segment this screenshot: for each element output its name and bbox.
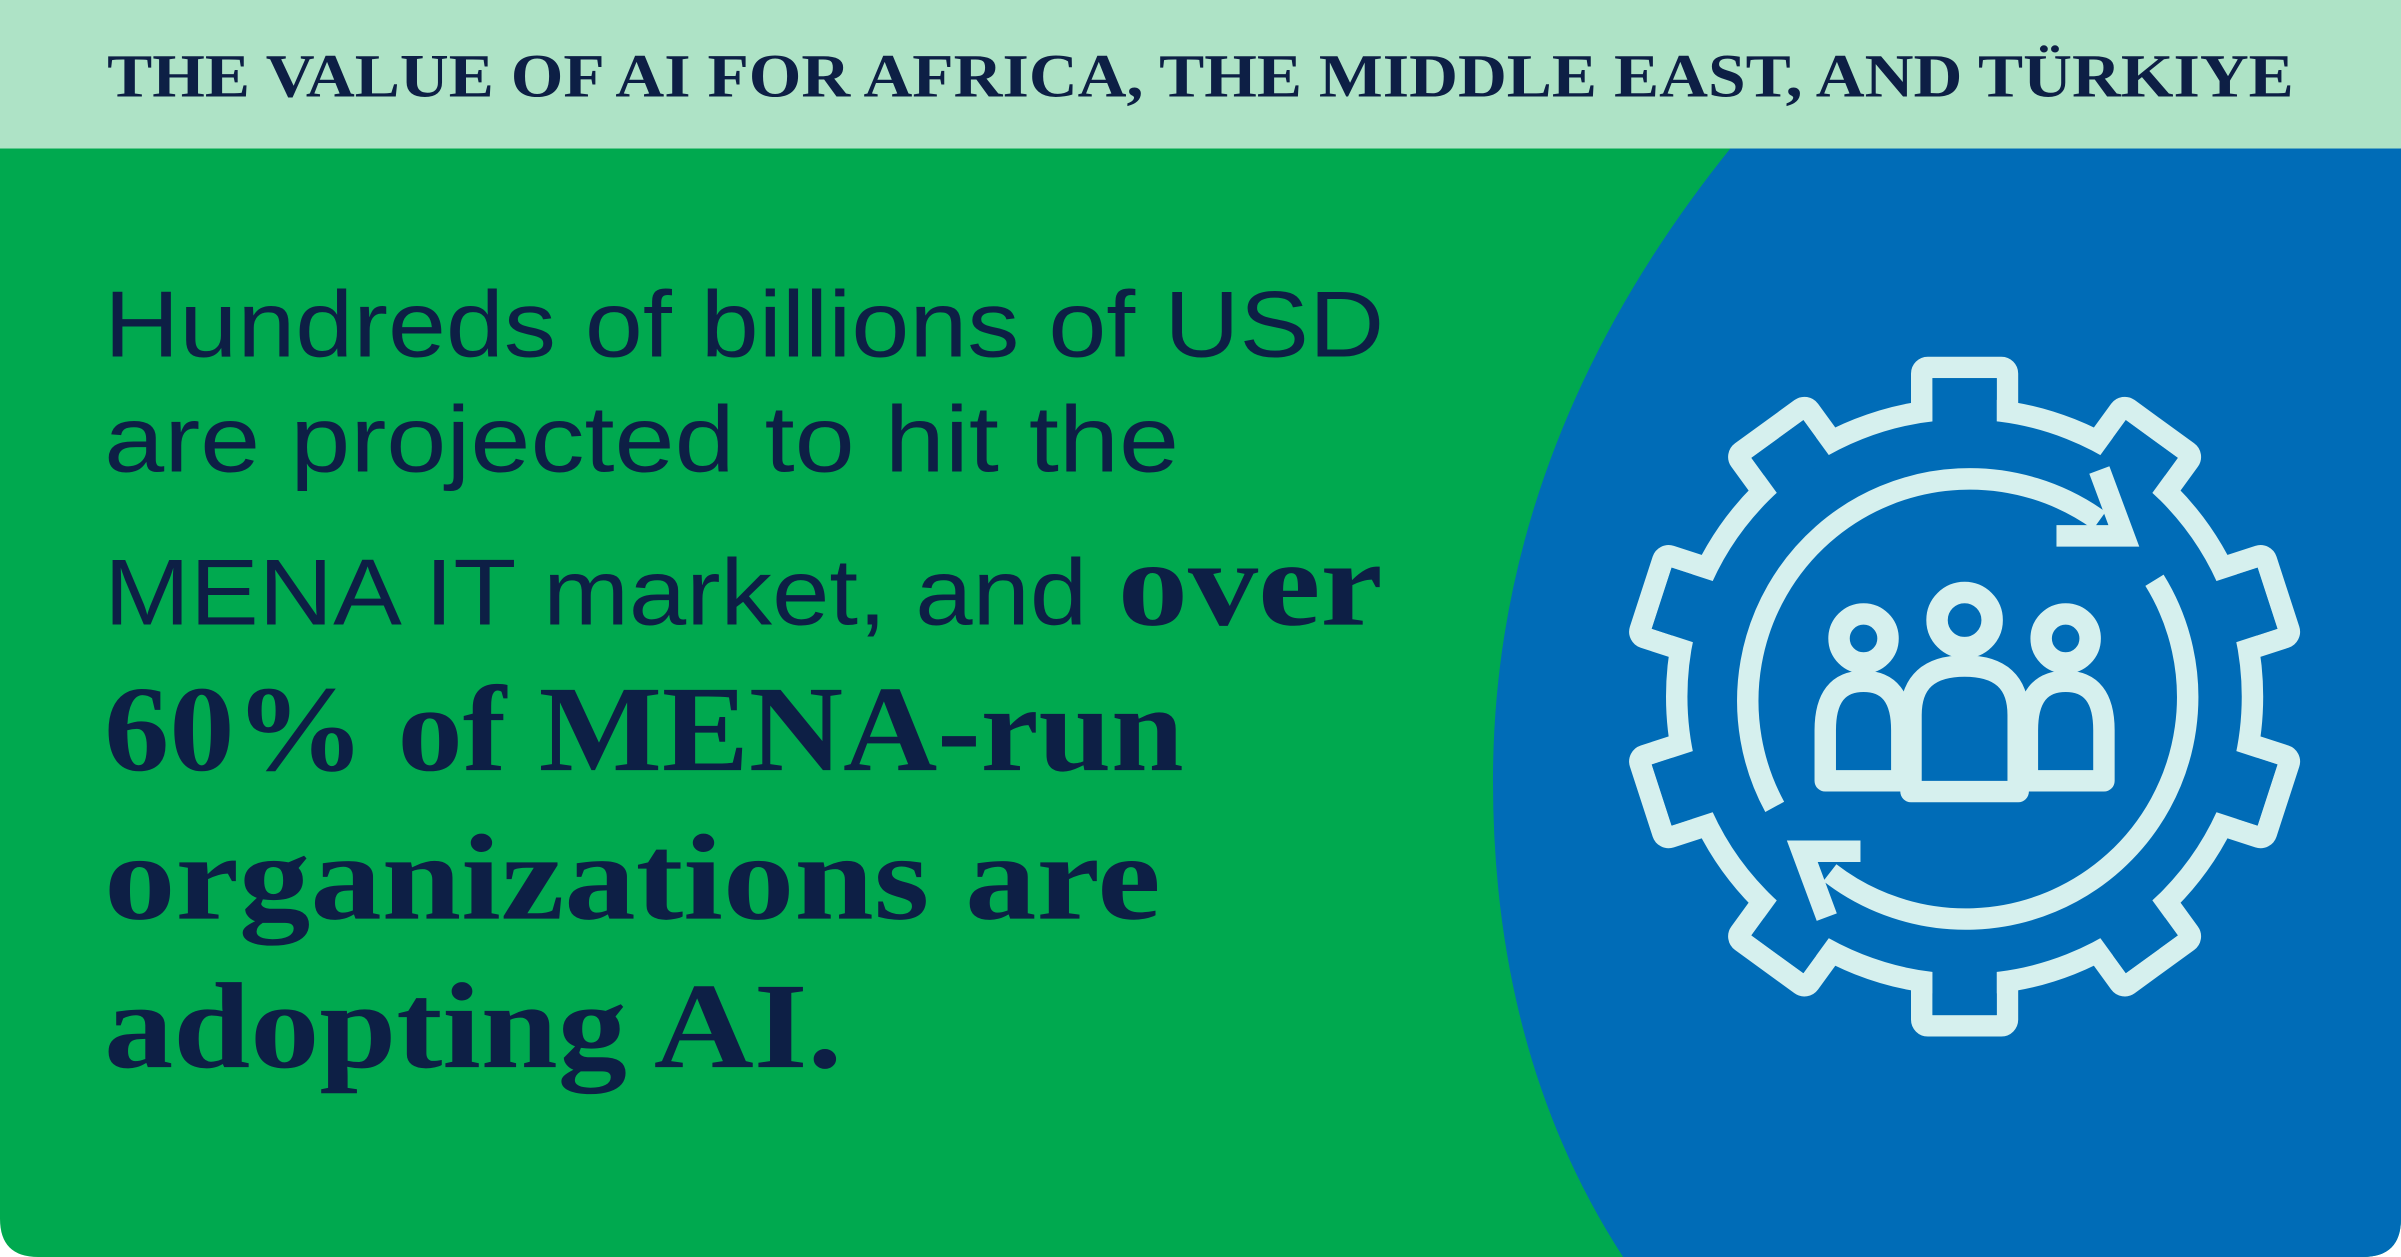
body text: organizations are	[104, 811, 1161, 946]
panel: blue curved region	[1493, 149, 2401, 1257]
icon: gear with people	[1638, 367, 2291, 1026]
body text: 60% of MENA-run	[104, 662, 1184, 797]
body text	[104, 272, 1384, 1094]
body text: adopting AI.	[104, 959, 842, 1094]
body text: over	[1118, 517, 1383, 652]
body text: Hundreds of billions of USD	[104, 272, 1384, 377]
header band	[0, 0, 2401, 149]
body text: MENA IT market, and	[104, 540, 1087, 645]
body text: are projected to hit the	[104, 387, 1179, 492]
title: THE VALUE OF AI FOR AFRICA, THE MIDDLE EAST, AND TÜRKIYE	[107, 42, 2294, 110]
arrows	[1748, 479, 2099, 807]
people	[1937, 593, 1992, 648]
